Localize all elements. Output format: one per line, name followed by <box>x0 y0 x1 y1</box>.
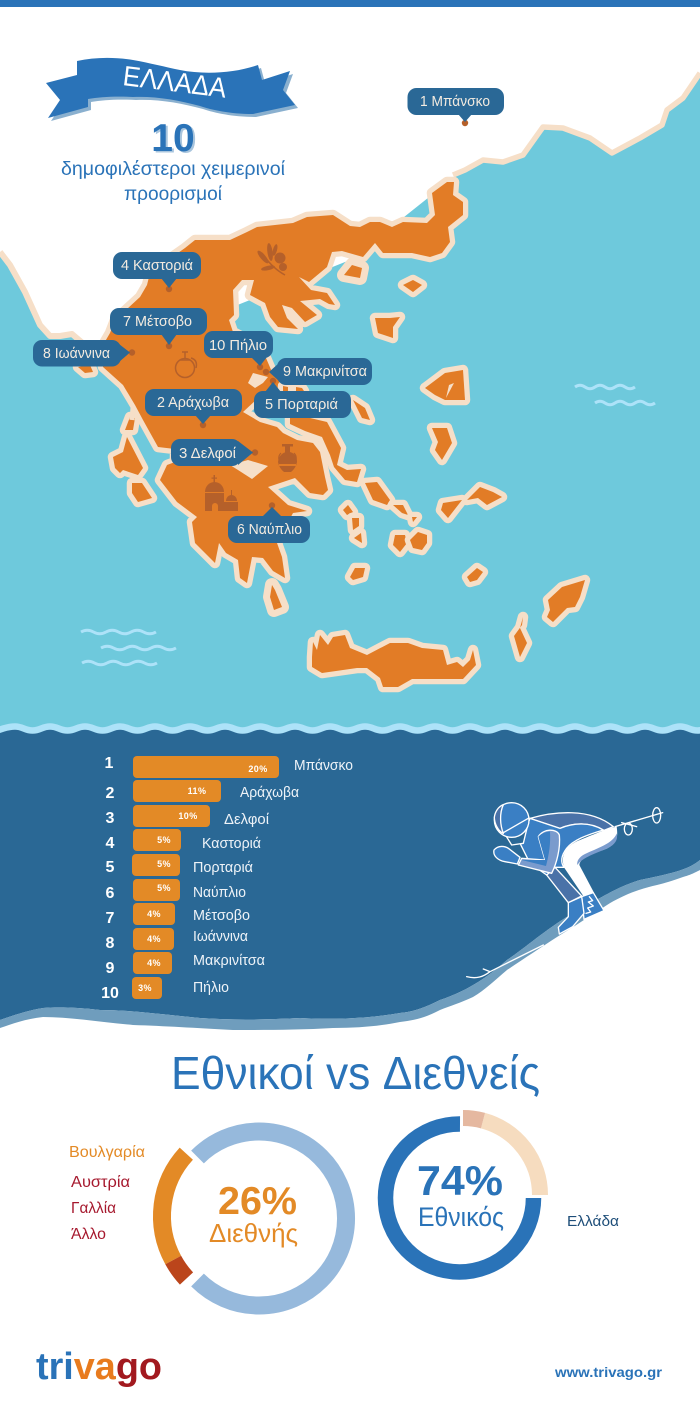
map label: 5 Πορταριά: 5 Πορταριά <box>265 397 338 413</box>
map label: 3 Δελφοί <box>171 439 258 466</box>
sea waves <box>81 385 655 665</box>
northern neighbouring land <box>0 0 700 352</box>
icon: skier <box>467 803 663 978</box>
helmet <box>494 803 529 837</box>
row 5 <box>106 854 253 876</box>
row 2: 11% <box>188 786 206 796</box>
row 1 <box>105 755 353 778</box>
map label: 7 Μέτσοβο <box>110 308 207 349</box>
row 3: 10% <box>178 811 198 821</box>
row 9: Μακρινίτσα <box>193 953 265 969</box>
icon: church <box>205 475 238 511</box>
row 3 <box>106 805 270 828</box>
row 5: 5% <box>157 859 171 869</box>
Karpathos <box>514 617 527 657</box>
legend: Ελλάδα: Ελλάδα <box>567 1213 619 1230</box>
row 10 <box>101 977 229 1002</box>
row 8: Ιωάννινα <box>193 929 248 945</box>
back <box>530 813 613 831</box>
row 7: 4% <box>147 909 161 919</box>
row 1: 1 <box>105 755 114 772</box>
ring: dark segment <box>463 1118 483 1121</box>
map label: 6 Ναύπλιο: 6 Ναύπλιο <box>237 522 302 538</box>
top bar <box>0 0 700 7</box>
ring: others <box>198 1132 346 1306</box>
row 4: 4 <box>106 835 115 852</box>
row 8: 8 <box>106 935 115 952</box>
ring: Greece <box>386 1124 534 1272</box>
row 2 <box>106 780 299 802</box>
value 74%: 74% <box>417 1157 503 1204</box>
row 1: Μπάνσκο <box>294 758 353 774</box>
row 9: 4% <box>147 958 161 968</box>
Crete <box>312 635 476 687</box>
row 10: 3% <box>138 983 152 993</box>
logo: trivago: trivago <box>36 1346 162 1388</box>
icon: amphora <box>278 444 297 472</box>
lower leg <box>547 867 582 903</box>
legend: international: Άλλο <box>71 1226 106 1243</box>
bar chart: top 10 destinations <box>101 755 353 1002</box>
subtitle: δημοφιλέστεροι χειμερινοί <box>61 159 286 180</box>
Aegean islands <box>467 487 502 505</box>
map label: 5 Πορταριά <box>254 378 351 418</box>
icon: jug <box>176 352 196 378</box>
icon: olive branch <box>256 243 287 275</box>
map label: 9 Μακρινίτσα <box>263 358 372 385</box>
big number 10: 10 <box>151 117 195 160</box>
row 6 <box>106 879 246 902</box>
map label: 4 Καστοριά <box>113 252 201 292</box>
pole <box>615 808 663 835</box>
row 10: 10 <box>101 985 119 1002</box>
row 2: Αράχωβα <box>240 785 299 801</box>
row 7: 7 <box>106 910 115 927</box>
row 8: 4% <box>147 934 161 944</box>
row 3: 3 <box>106 810 115 827</box>
row 9: 9 <box>106 960 115 977</box>
map label: 7 Μέτσοβο: 7 Μέτσοβο <box>123 314 192 330</box>
sea <box>0 60 700 732</box>
face <box>503 818 529 845</box>
label Διεθνής: Διεθνής <box>209 1218 298 1248</box>
subtitle <box>61 159 286 205</box>
banner ribbon <box>46 58 298 121</box>
banner title: ΕΛΛΑΔΑ <box>121 60 229 104</box>
row 7: Μέτσοβο <box>193 908 250 924</box>
legend: international <box>69 1144 145 1243</box>
map label: 9 Μακρινίτσα: 9 Μακρινίτσα <box>283 364 367 380</box>
row 4 <box>106 829 261 852</box>
thigh <box>563 827 617 896</box>
legend: international: Αυστρία <box>71 1174 130 1191</box>
donut chart: international 26% <box>162 1132 346 1306</box>
Rhodes <box>547 580 585 622</box>
Euboea <box>290 418 361 482</box>
map label: 10 Πήλιο <box>204 331 273 370</box>
ring: Austria, France, other <box>173 1260 186 1278</box>
mainland Greece <box>100 182 463 583</box>
row 7 <box>106 903 250 927</box>
islands <box>78 265 585 687</box>
row 5: 5 <box>106 859 115 876</box>
map label: 8 Ιωάννινα: 8 Ιωάννινα <box>43 346 110 362</box>
map label: 4 Καστοριά: 4 Καστοριά <box>121 258 193 274</box>
row 2: 2 <box>106 785 115 802</box>
glove <box>494 846 520 864</box>
ring: Bulgaria <box>162 1154 186 1260</box>
legend: international: Βουλγαρία <box>69 1144 145 1161</box>
map of Greece <box>0 0 700 732</box>
big number 10: 10 <box>153 118 197 162</box>
panel: ranking section background <box>0 726 700 1030</box>
arm <box>518 830 560 873</box>
map label: 8 Ιωάννινα <box>33 340 135 366</box>
row 6: 6 <box>106 885 115 902</box>
map label: 2 Αράχωβα: 2 Αράχωβα <box>157 395 229 411</box>
back boot <box>582 893 604 919</box>
row 4: 5% <box>157 835 171 845</box>
torso <box>520 818 603 875</box>
map label: 3 Δελφοί: 3 Δελφοί <box>179 446 237 462</box>
heading: national vs international: Εθνικοί vs Διεθνείς <box>171 1047 540 1099</box>
map label: 2 Αράχωβα <box>145 389 242 428</box>
row 10: Πήλιο <box>193 980 229 996</box>
row 9 <box>106 952 265 977</box>
subtitle: προορισμοί <box>124 184 223 205</box>
map label: 6 Ναύπλιο <box>228 502 310 543</box>
website url: www.trivago.gr <box>554 1364 663 1380</box>
row 6: 5% <box>157 883 171 893</box>
Ionian islands <box>125 417 135 430</box>
ring: light segment <box>483 1121 540 1195</box>
donut chart: national 74% <box>386 1118 540 1272</box>
legend: international: Γαλλία <box>71 1200 116 1217</box>
row 6: Ναύπλιο <box>193 885 246 901</box>
map label: 1 Μπάνσκο: 1 Μπάνσκο <box>420 94 490 110</box>
row 4: Καστοριά <box>202 836 261 852</box>
ski <box>467 945 543 978</box>
row 3: Δελφοί <box>224 812 270 828</box>
map label: 1 Μπάνσκο <box>408 88 504 126</box>
row 8 <box>106 928 248 952</box>
value 26%: 26% <box>218 1180 297 1223</box>
label Εθνικός: Εθνικός <box>418 1202 504 1232</box>
front boot <box>558 897 584 934</box>
row 1: 20% <box>248 764 268 774</box>
map label: 10 Πήλιο: 10 Πήλιο <box>209 338 267 354</box>
row 5: Πορταριά <box>193 860 253 876</box>
